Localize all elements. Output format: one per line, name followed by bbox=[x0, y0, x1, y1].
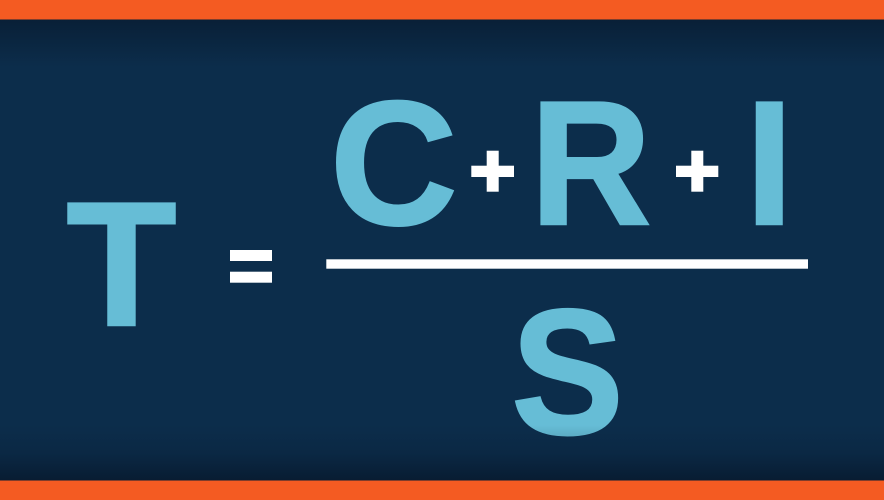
formula bbox=[66, 65, 808, 472]
plus sign 1 bbox=[471, 151, 514, 192]
letter R: R bbox=[530, 65, 651, 262]
bottom shadow bbox=[0, 425, 884, 481]
letter S: S bbox=[511, 272, 624, 472]
plus sign 2 bbox=[676, 151, 718, 192]
bottom orange bar bbox=[0, 480, 884, 500]
top orange bar bbox=[0, 0, 884, 20]
fraction bar bbox=[326, 259, 808, 269]
equals sign bbox=[230, 250, 272, 283]
letter T: T bbox=[66, 166, 176, 363]
letter C: C bbox=[330, 65, 457, 262]
letter I: I bbox=[746, 65, 793, 262]
top shadow bbox=[0, 19, 884, 67]
